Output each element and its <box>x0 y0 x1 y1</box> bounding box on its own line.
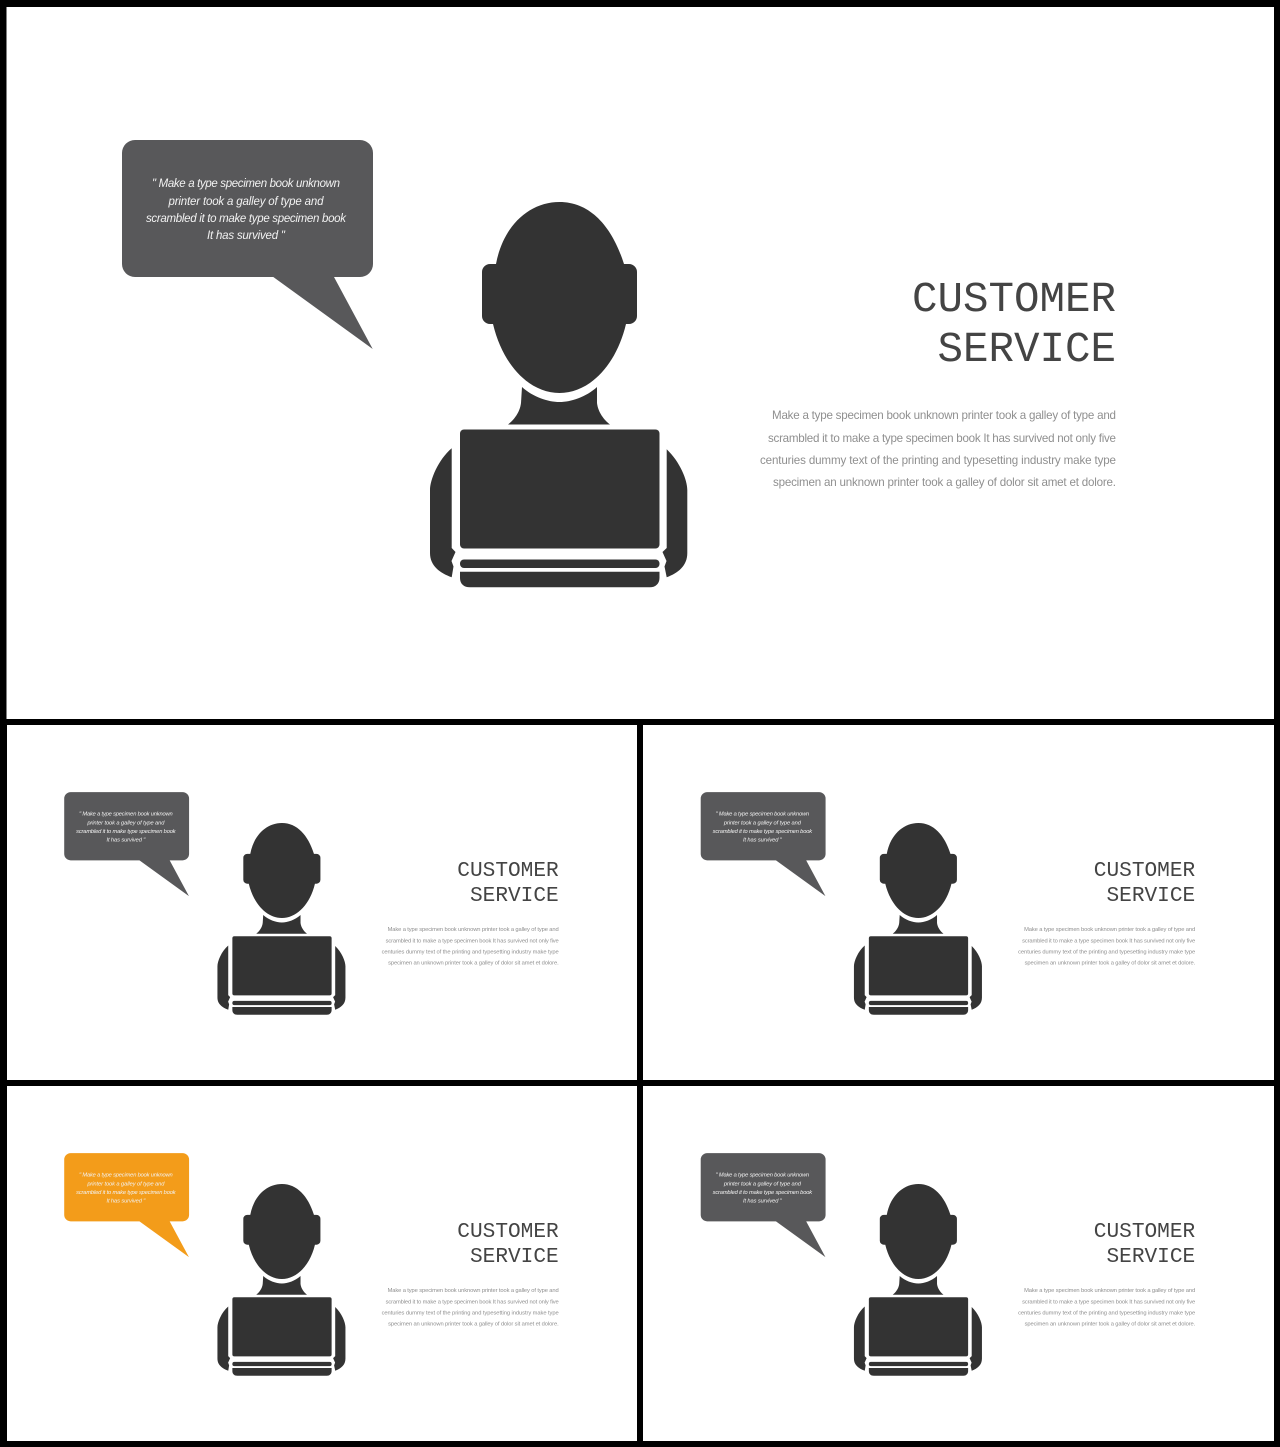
body text: Make a type specimen book unknown printer took a galley of type and <box>772 409 1116 422</box>
speech bubble: It has survived " <box>743 1198 783 1204</box>
panel: small slide bottom right <box>643 1086 1274 1441</box>
speech bubble: It has survived " <box>743 837 783 843</box>
body text: scrambled it to make a type specimen book It has survived not only five <box>768 432 1116 445</box>
title: CUSTOMER <box>457 1220 559 1244</box>
speech bubble <box>701 1153 826 1257</box>
icon: person with laptop <box>217 823 345 1015</box>
body text: specimen an unknown printer took a galley of dolor sit amet et dolore. <box>388 1321 559 1327</box>
speech bubble: orange <box>64 1153 189 1257</box>
speech bubble: printer took a galley of type and <box>168 196 324 208</box>
speech bubble: " Make a type specimen book unknown <box>716 812 809 818</box>
speech bubble: It has survived " <box>207 230 286 242</box>
speech bubble <box>64 792 189 896</box>
speech bubble: scrambled it to make type specimen book <box>713 829 813 835</box>
title <box>1094 859 1196 908</box>
panel: small slide top right <box>643 725 1274 1080</box>
speech bubble: orange: " Make a type specimen book unknown <box>79 1173 173 1179</box>
title: SERVICE <box>470 1245 559 1269</box>
body text <box>382 927 559 966</box>
panel: small slide top left <box>7 725 637 1080</box>
speech bubble: " Make a type specimen book unknown <box>716 1173 809 1179</box>
speech bubble: It has survived " <box>106 837 146 843</box>
speech bubble: scrambled it to make type specimen book <box>713 1190 813 1196</box>
title: SERVICE <box>470 884 559 908</box>
speech bubble: orange: scrambled it to make type specimen book <box>76 1190 177 1196</box>
title: CUSTOMER <box>912 276 1116 324</box>
title: SERVICE <box>1106 884 1195 908</box>
body text: specimen an unknown printer took a galley of dolor sit amet et dolore. <box>773 476 1116 489</box>
body text: specimen an unknown printer took a galley of dolor sit amet et dolore. <box>1025 960 1196 966</box>
body text <box>1018 927 1196 966</box>
speech bubble: printer took a galley of type and <box>86 821 165 827</box>
body text: scrambled it to make a type specimen book It has survived not only five <box>1022 1299 1195 1305</box>
title: SERVICE <box>1106 1245 1195 1269</box>
panel: small slide bottom left (orange) <box>7 1086 637 1441</box>
speech bubble: " Make a type specimen book unknown <box>79 812 173 818</box>
body text: Make a type specimen book unknown printer took a galley of type and <box>388 1288 559 1294</box>
body text: scrambled it to make a type specimen book It has survived not only five <box>386 1299 559 1305</box>
speech bubble <box>122 140 373 349</box>
title: CUSTOMER <box>1094 1220 1196 1244</box>
body text: centuries dummy text of the printing and typesetting industry make type <box>1018 1310 1195 1316</box>
body text: centuries dummy text of the printing and typesetting industry make type <box>382 949 559 955</box>
body text: centuries dummy text of the printing and typesetting industry make type <box>1018 949 1195 955</box>
title <box>457 1220 559 1269</box>
body text: specimen an unknown printer took a galley of dolor sit amet et dolore. <box>1025 1321 1196 1327</box>
speech bubble: orange: printer took a galley of type and <box>86 1182 165 1188</box>
body text <box>382 1288 559 1327</box>
body text: specimen an unknown printer took a galley of dolor sit amet et dolore. <box>388 960 559 966</box>
icon: person with laptop <box>430 202 687 587</box>
title <box>457 859 559 908</box>
body text <box>760 409 1116 489</box>
body text: scrambled it to make a type specimen book It has survived not only five <box>386 938 559 944</box>
body text: Make a type specimen book unknown printer took a galley of type and <box>1024 927 1195 933</box>
panel: main slide <box>6 7 1274 719</box>
icon: person with laptop <box>854 823 982 1015</box>
body text: centuries dummy text of the printing and typesetting industry make type <box>382 1310 559 1316</box>
speech bubble: orange: It has survived " <box>106 1198 146 1204</box>
speech bubble <box>701 792 826 896</box>
body text <box>1018 1288 1196 1327</box>
body text: scrambled it to make a type specimen book It has survived not only five <box>1022 938 1195 944</box>
title: CUSTOMER <box>1094 859 1196 883</box>
icon: person with laptop <box>217 1184 345 1376</box>
speech bubble: scrambled it to make type specimen book <box>146 213 347 225</box>
title: CUSTOMER <box>457 859 559 883</box>
speech bubble: " Make a type specimen book unknown <box>152 178 340 190</box>
speech bubble: printer took a galley of type and <box>723 821 802 827</box>
body text: Make a type specimen book unknown printer took a galley of type and <box>388 927 559 933</box>
body text: Make a type specimen book unknown printer took a galley of type and <box>1024 1288 1195 1294</box>
title: SERVICE <box>937 326 1116 374</box>
speech bubble: printer took a galley of type and <box>723 1182 802 1188</box>
icon: person with laptop <box>854 1184 982 1376</box>
body text: centuries dummy text of the printing and typesetting industry make type <box>760 454 1116 467</box>
title <box>912 276 1116 374</box>
title <box>1094 1220 1196 1269</box>
speech bubble: scrambled it to make type specimen book <box>76 829 177 835</box>
